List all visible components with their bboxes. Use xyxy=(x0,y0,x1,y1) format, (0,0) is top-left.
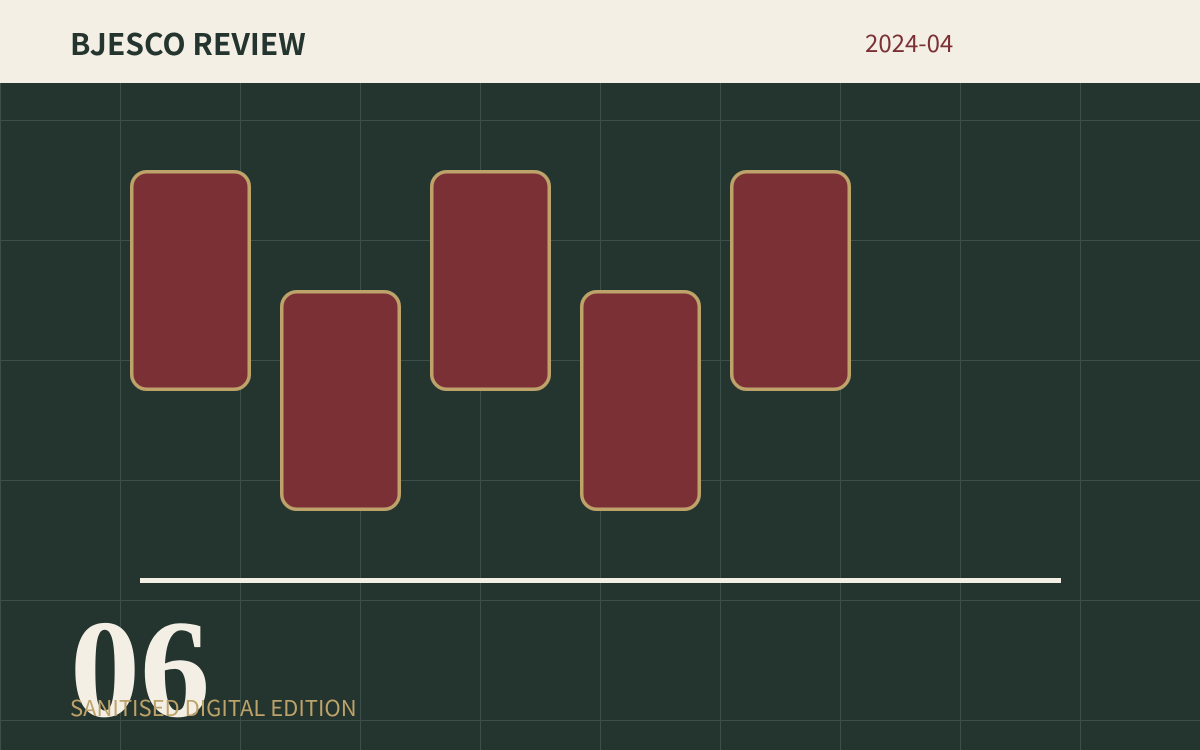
card 3 xyxy=(432,172,549,389)
header band xyxy=(0,0,1200,83)
card 4 xyxy=(582,292,699,509)
card 2 xyxy=(282,292,399,509)
card 1 xyxy=(132,172,249,389)
title: BJESCO REVIEW xyxy=(70,20,306,64)
edition caption: SANITISED DIGITAL EDITION xyxy=(70,691,357,723)
card 5 xyxy=(732,172,849,389)
horizontal rule xyxy=(140,578,1061,583)
issue number: 06 xyxy=(70,592,210,747)
issue date: 2024-04 xyxy=(865,24,953,59)
